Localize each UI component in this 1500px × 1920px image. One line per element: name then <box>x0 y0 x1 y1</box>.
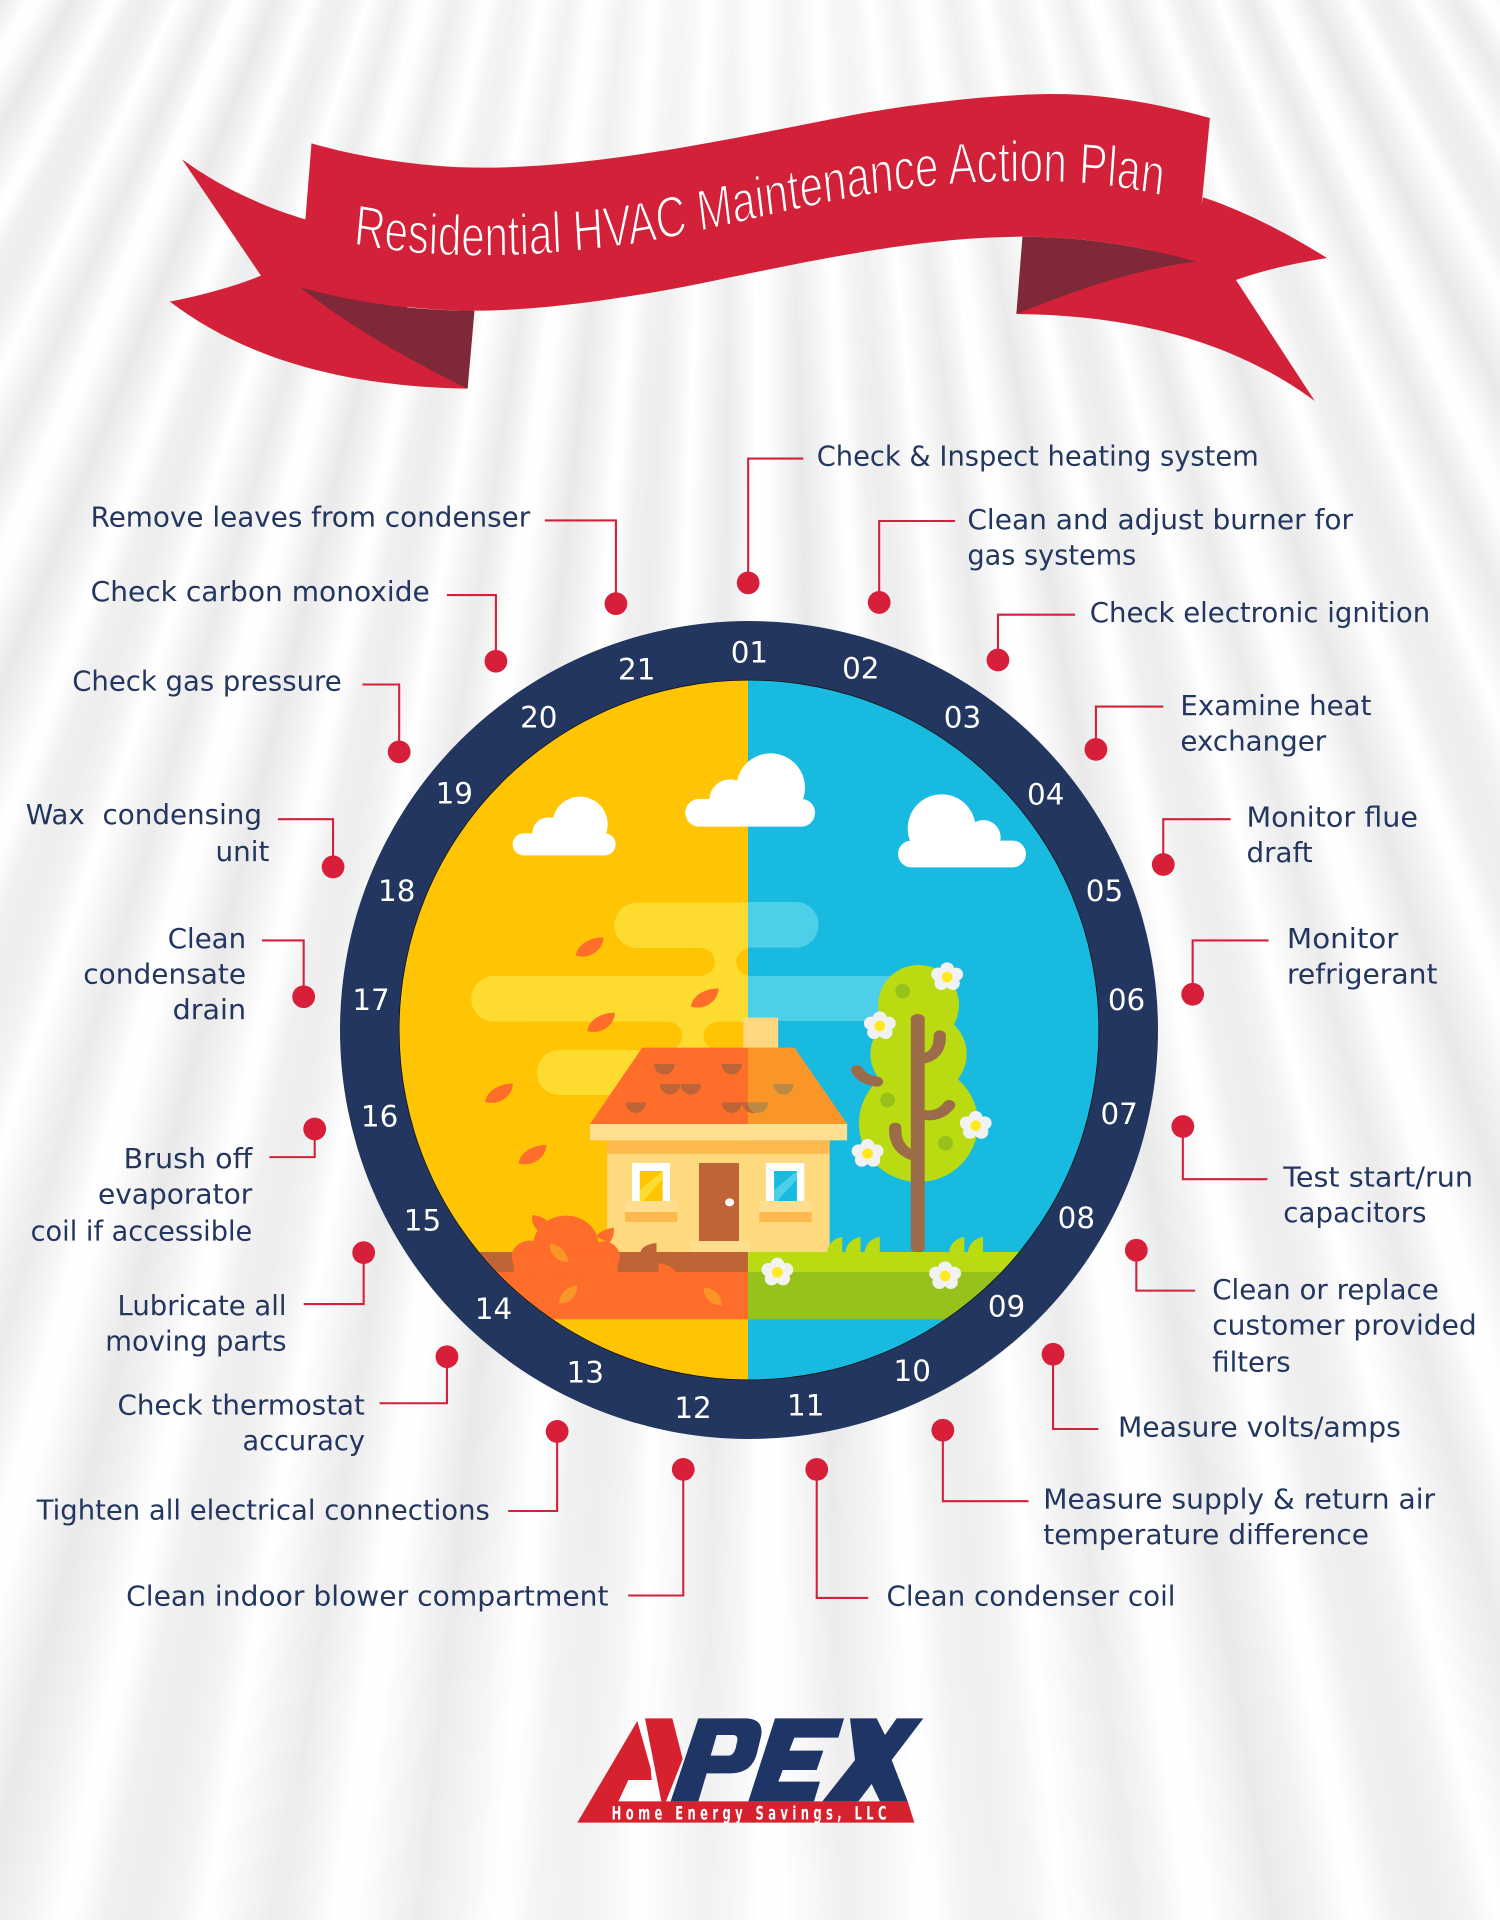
dial numbers 01 to 21: 18 <box>378 874 415 908</box>
flowers <box>761 962 992 1289</box>
item 10: Measure supply & return air temperature difference <box>931 1419 1436 1551</box>
item 15: Lubricate all moving parts: Lubricate all <box>118 1290 287 1322</box>
dial numbers 01 to 21 <box>352 635 1145 1425</box>
dial numbers 01 to 21: 19 <box>436 776 473 810</box>
item 08: Clean or replace customer provided filters: Clean or replace <box>1212 1274 1439 1306</box>
autumn bush <box>512 1215 676 1274</box>
dial numbers 01 to 21: 01 <box>731 635 768 669</box>
item 07: Test start/run capacitors: Test start/run <box>1282 1162 1473 1194</box>
dial numbers 01 to 21: 20 <box>520 700 557 734</box>
logo: APEX Home Energy Savings, LLC <box>577 1718 923 1824</box>
item 06: Monitor refrigerant <box>1181 923 1438 1006</box>
dial: navy ring with season scene <box>340 621 1158 1439</box>
title text: Residential HVAC Maintenance Action Plan <box>357 140 1162 256</box>
item 16: Brush off evaporator coil: evaporator <box>98 1179 253 1211</box>
grass blades <box>827 1237 983 1252</box>
dial numbers 01 to 21: 03 <box>944 700 981 734</box>
dial numbers 01 to 21: 05 <box>1086 874 1123 908</box>
dial numbers 01 to 21: 14 <box>475 1292 512 1326</box>
item 01: Check & Inspect heating system <box>737 440 1259 594</box>
item 14: Check thermostat accuracy: Check thermostat <box>118 1389 365 1421</box>
item 05: Monitor flue draft: draft <box>1247 837 1313 869</box>
item 01: Check & Inspect heating system: Check & Inspect heating system <box>817 440 1259 472</box>
item 14: Check thermostat accuracy: accuracy <box>242 1425 365 1457</box>
tree <box>857 965 978 1253</box>
item 14: Check thermostat accuracy <box>118 1345 458 1457</box>
cloud middle <box>685 753 815 827</box>
item 07: Test start/run capacitors <box>1171 1115 1473 1229</box>
dial numbers 01 to 21: 16 <box>361 1100 398 1134</box>
scene <box>389 680 1100 1380</box>
item 07: Test start/run capacitors: capacitors <box>1283 1197 1427 1229</box>
item 11: Clean condenser coil <box>805 1458 1176 1612</box>
item 12: Clean indoor blower compartment: Clean indoor blower compartment <box>126 1580 609 1612</box>
ribbon: right tail <box>1016 197 1327 401</box>
item 05: Monitor flue draft <box>1152 802 1418 876</box>
title ribbon <box>170 94 1327 401</box>
dial numbers 01 to 21: 10 <box>894 1354 931 1388</box>
spring ground <box>748 1252 1019 1320</box>
logo: tagline: Home Energy Savings, LLC <box>612 1803 887 1824</box>
ribbon: right fold shadow <box>1016 237 1196 314</box>
logo: red A and banner <box>577 1718 914 1823</box>
clouds <box>513 753 1026 867</box>
falling leaves <box>485 937 719 1164</box>
item 17: Clean condensate drain: drain <box>173 994 246 1026</box>
item 15: Lubricate all moving parts: moving parts <box>105 1326 287 1358</box>
item 11: Clean condenser coil: Clean condenser coil <box>887 1580 1176 1612</box>
item 16: Brush off evaporator coil: Brush off <box>124 1143 253 1175</box>
item 08: Clean or replace customer provided filters: customer provided <box>1212 1310 1477 1342</box>
item 10: Measure supply & return air temperature difference: temperature difference <box>1043 1519 1369 1551</box>
ribbon: left tail <box>170 159 468 389</box>
dial numbers 01 to 21: 08 <box>1058 1201 1095 1235</box>
dial numbers 01 to 21: 11 <box>787 1389 824 1423</box>
item 13: Tighten all electrical connections: Tighten all electrical connections <box>36 1495 490 1527</box>
item 03: Check electronic ignition <box>987 597 1430 671</box>
autumn ground <box>479 1252 748 1320</box>
item 15: Lubricate all moving parts <box>105 1241 375 1358</box>
cloud left <box>513 797 616 855</box>
spring half background <box>748 680 1100 1380</box>
item 18: Wax condensing unit: unit <box>216 836 270 868</box>
item 20: Check carbon monoxide <box>91 576 507 673</box>
dial numbers 01 to 21: 17 <box>352 983 390 1017</box>
item 17: Clean condensate drain <box>83 923 315 1026</box>
item 19: Check gas pressure <box>72 666 411 763</box>
item 20: Check carbon monoxide: Check carbon monoxide <box>91 576 430 608</box>
wind bands spring side <box>748 902 891 1021</box>
item 13: Tighten all electrical connections <box>36 1420 569 1527</box>
item 17: Clean condensate drain: condensate <box>83 958 246 990</box>
dial numbers 01 to 21: 04 <box>1027 777 1064 811</box>
item 02: Clean and adjust burner: Clean and adjust burner for <box>967 504 1354 536</box>
ribbon: left fold shadow <box>300 287 474 389</box>
item 12: Clean indoor blower compartment <box>126 1458 695 1612</box>
item 16: Brush off evaporator coil <box>31 1118 326 1247</box>
dial numbers 01 to 21: 13 <box>567 1355 604 1389</box>
item 18: Wax condensing unit <box>26 799 344 878</box>
wall <box>607 1140 830 1252</box>
roof <box>590 1048 748 1124</box>
item 03: Check electronic ignition: Check electronic ignition <box>1090 597 1430 629</box>
chimney <box>743 1018 778 1048</box>
action items with leader lines <box>26 440 1477 1612</box>
dial numbers 01 to 21: 06 <box>1108 983 1145 1017</box>
dial numbers 01 to 21: 15 <box>404 1204 441 1238</box>
item 21: Remove leaves from condenser <box>91 502 627 615</box>
house <box>590 1018 847 1252</box>
ground leaves <box>559 1285 722 1305</box>
cloud right <box>898 794 1026 867</box>
window right <box>759 1163 812 1222</box>
ribbon: main band <box>300 94 1210 311</box>
item 17: Clean condensate drain: Clean <box>168 923 246 955</box>
item 19: Check gas pressure: Check gas pressure <box>72 666 342 698</box>
item 06: Monitor refrigerant: refrigerant <box>1287 958 1438 990</box>
dial numbers 01 to 21: 09 <box>988 1289 1025 1323</box>
dial inner edge <box>399 680 1099 1380</box>
wind bands autumn side <box>471 902 748 1095</box>
item 10: Measure supply & return air temperature difference: Measure supply & return air <box>1043 1484 1436 1516</box>
window left <box>625 1163 677 1222</box>
item 08: Clean or replace customer provided filters <box>1125 1239 1477 1378</box>
item 08: Clean or replace customer provided filters: filters <box>1212 1346 1291 1378</box>
item 16: Brush off evaporator coil: coil if accessible <box>31 1215 252 1247</box>
item 05: Monitor flue draft: Monitor flue <box>1247 802 1418 834</box>
door <box>690 1163 750 1252</box>
dial numbers 01 to 21: 02 <box>842 651 880 685</box>
dial numbers 01 to 21: 07 <box>1100 1097 1138 1131</box>
item 02: Clean and adjust burner: gas systems <box>967 539 1136 571</box>
item 06: Monitor refrigerant: Monitor <box>1287 923 1399 955</box>
eave <box>590 1124 847 1140</box>
dial numbers 01 to 21: 21 <box>618 653 655 687</box>
autumn half background <box>398 680 748 1380</box>
item 09: Measure volts/amps: Measure volts/amps <box>1118 1411 1401 1443</box>
item 04: Examine heat exchanger <box>1085 690 1372 761</box>
roof shingles <box>626 1064 763 1113</box>
dial numbers 01 to 21: 12 <box>674 1391 712 1425</box>
item 04: Examine heat exchanger: exchanger <box>1180 726 1327 758</box>
item 09: Measure volts/amps <box>1042 1343 1401 1443</box>
item 04: Examine heat exchanger: Examine heat <box>1180 690 1372 722</box>
item 02: Clean and adjust burner <box>868 504 1354 614</box>
dial ring <box>340 621 1158 1439</box>
logo: navy PEX <box>671 1718 923 1801</box>
item 18: Wax condensing unit: Wax condensing <box>26 799 262 831</box>
item 21: Remove leaves from condenser: Remove leaves from condenser <box>91 502 531 534</box>
